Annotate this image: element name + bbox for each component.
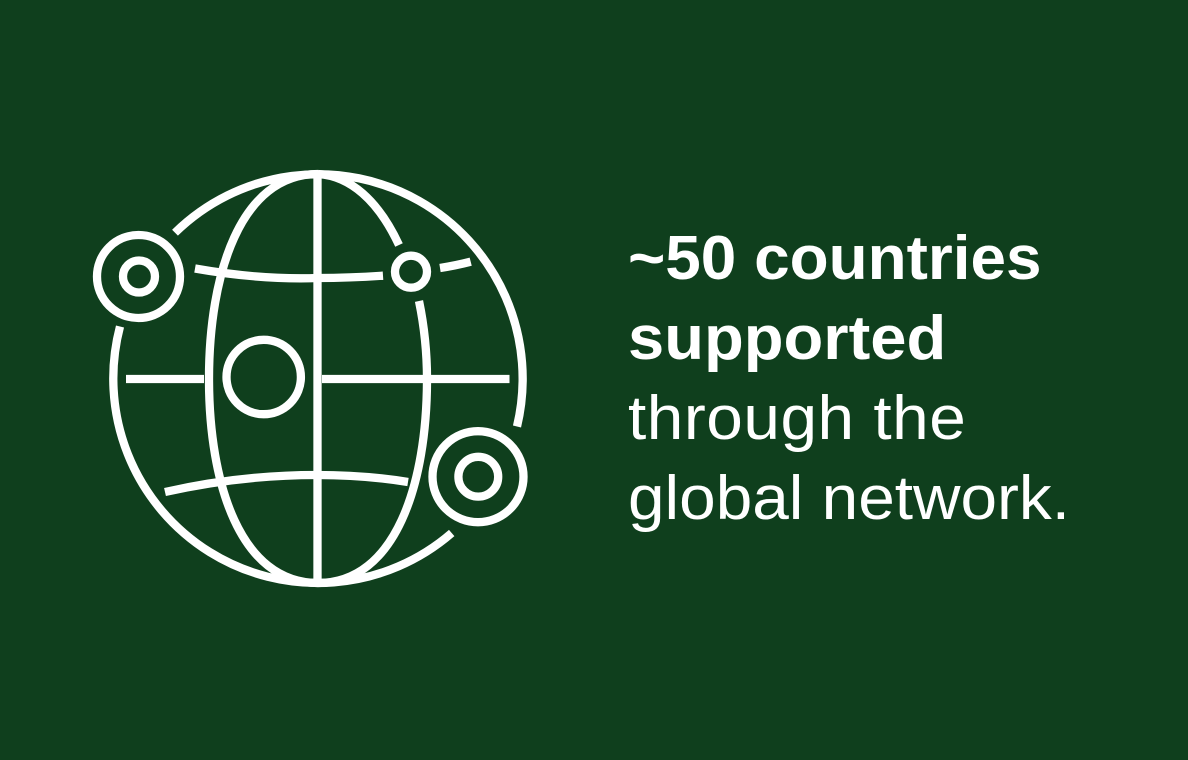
equator (126, 375, 510, 383)
globe outer outline (113, 174, 523, 583)
marker top right (395, 256, 427, 288)
marker centre (227, 340, 301, 414)
globe left meridian (209, 174, 318, 583)
globe right meridian lower part (318, 301, 427, 583)
upper latitude (195, 262, 471, 278)
text line: supported: supported (628, 304, 946, 373)
globe right meridian upper part (318, 174, 399, 245)
text line: through the: through the (628, 384, 966, 453)
lower latitude (165, 475, 408, 492)
text line: ~50 countries: ~50 countries (628, 224, 1042, 293)
marker lower right (432, 431, 524, 522)
central meridian (313, 174, 322, 583)
text line: global network.: global network. (628, 464, 1070, 533)
marker left (97, 235, 180, 318)
